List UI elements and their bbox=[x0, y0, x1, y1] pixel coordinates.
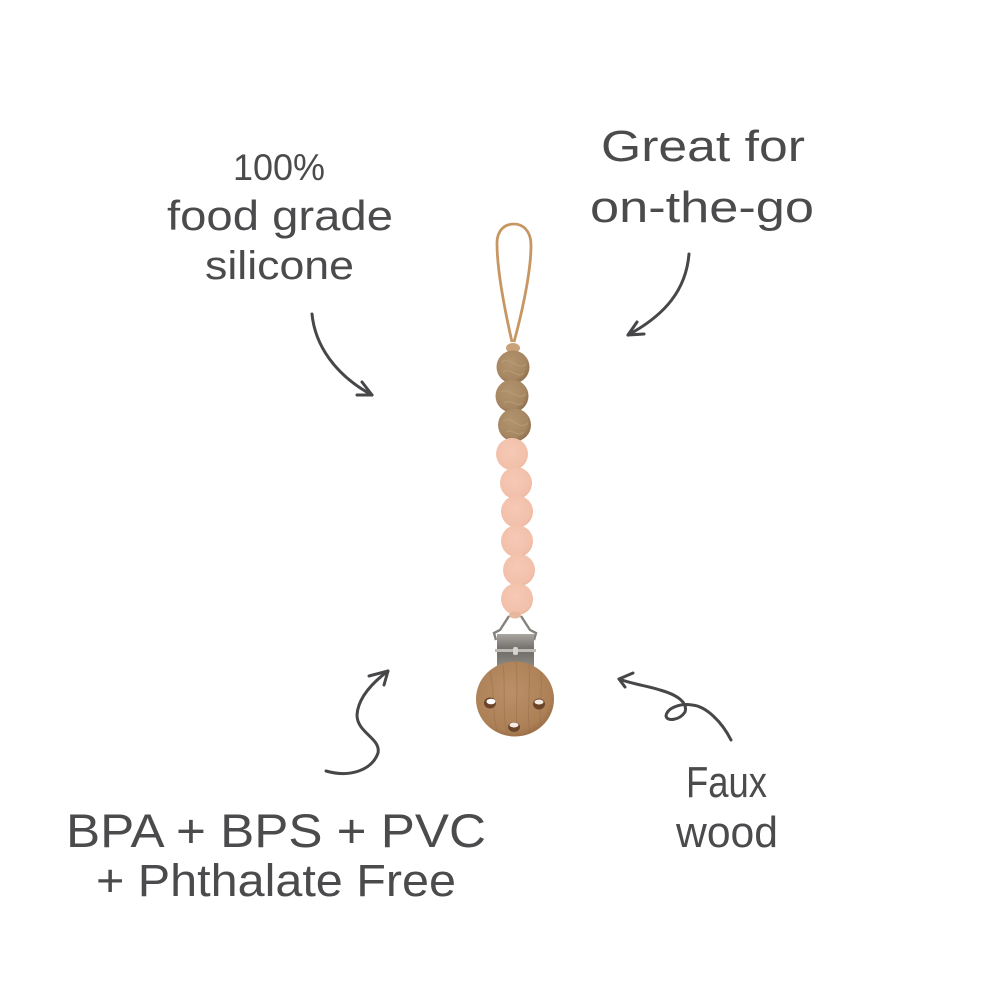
cord loop bbox=[497, 224, 531, 342]
callout: food grade silicone bbox=[167, 147, 393, 288]
metal clip bbox=[494, 612, 536, 666]
arrow: on-the-go to clip bbox=[628, 254, 689, 335]
text: BPA + BPS + PVC: BPA + BPS + PVC bbox=[66, 804, 486, 857]
arrow: free-of callout to clip bbox=[326, 671, 388, 774]
callout: free of BPA, BPS, PVC, phthalate bbox=[66, 804, 486, 906]
text: 100%: 100% bbox=[233, 147, 325, 188]
text: + Phthalate Free: + Phthalate Free bbox=[96, 855, 456, 906]
wood disc bbox=[476, 662, 554, 736]
text: silicone: silicone bbox=[205, 244, 354, 288]
cord knot bbox=[506, 343, 520, 353]
callout: faux wood bbox=[675, 758, 778, 857]
silicone beads bbox=[496, 438, 535, 615]
text: Great for: Great for bbox=[601, 122, 805, 171]
text: wood: wood bbox=[675, 808, 778, 857]
text: food grade: food grade bbox=[167, 192, 393, 239]
arrow: faux wood to disc bbox=[619, 673, 731, 740]
wood beads bbox=[496, 350, 531, 442]
product: pacifier clip bbox=[476, 224, 554, 736]
text: on-the-go: on-the-go bbox=[590, 183, 814, 232]
arrow: silicone to beads bbox=[312, 314, 372, 395]
callout: great for on-the-go bbox=[590, 122, 814, 232]
text: Faux: Faux bbox=[686, 758, 767, 807]
